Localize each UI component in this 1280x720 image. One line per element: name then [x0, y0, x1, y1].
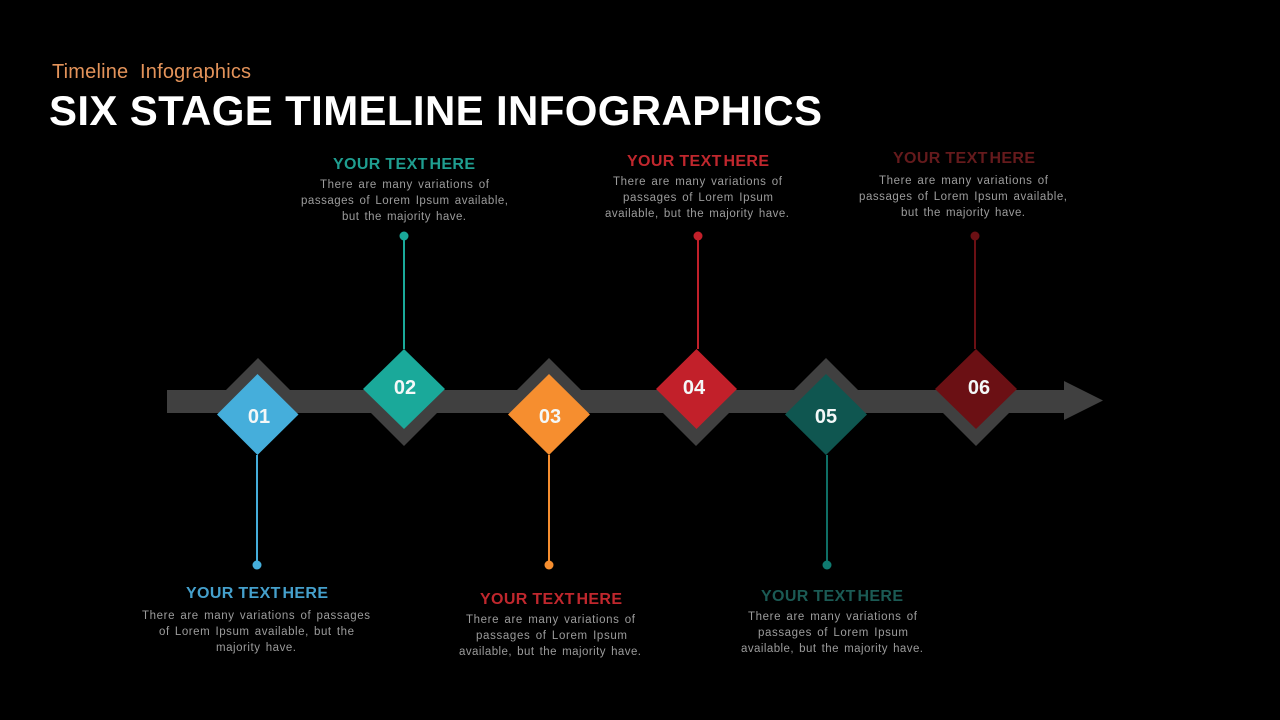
stage 01 description: There are many variations of passages	[142, 610, 370, 622]
stage 01 number: 01	[248, 406, 270, 428]
stage 05	[741, 358, 923, 655]
stage 02	[301, 156, 508, 446]
stage 04 backing diamond	[654, 362, 738, 446]
stage 01	[142, 358, 370, 654]
stage 03 description: available, but the majority have.	[459, 646, 641, 658]
stage 02 description: There are many variations of	[320, 179, 490, 191]
stage 04 description	[605, 176, 789, 220]
stage 03 end dot	[544, 560, 554, 570]
stage 04	[605, 153, 789, 446]
stage 06 description: passages of Lorem Ipsum available,	[859, 191, 1067, 203]
stage 05 end dot	[822, 560, 832, 570]
stage 02 heading: YOUR TEXT HERE	[333, 156, 475, 173]
stage 03	[459, 358, 641, 658]
stage 01 heading: YOUR TEXT HERE	[186, 585, 328, 602]
stage 03 backing diamond	[507, 358, 591, 442]
stage 06 connector line	[974, 236, 976, 349]
stage 03 description: passages of Lorem Ipsum	[476, 630, 627, 642]
stage 06 description	[859, 175, 1067, 219]
stage 02 description: but the majority have.	[342, 211, 466, 223]
stage 06 number: 06	[968, 377, 990, 399]
stage 04 end dot	[694, 232, 702, 240]
stage 02 description	[301, 179, 508, 223]
stage 06 backing diamond	[934, 362, 1018, 446]
stage 02 backing diamond	[362, 362, 446, 446]
title: SIX STAGE TIMELINE INFOGRAPHICS	[49, 87, 822, 134]
stage 01 description: majority have.	[216, 642, 296, 654]
stage 05 backing diamond	[784, 358, 868, 442]
stage 04 description: available, but the majority have.	[605, 208, 789, 220]
subtitle: Timeline Infographics	[52, 61, 251, 83]
stage 05 diamond	[785, 374, 867, 455]
stage 06 heading: YOUR TEXT HERE	[893, 150, 1035, 167]
stage 03 description: There are many variations of	[466, 614, 636, 626]
stage 05 description: passages of Lorem Ipsum	[758, 627, 908, 639]
stage 03 description	[459, 614, 641, 658]
stage 02 end dot	[400, 232, 408, 240]
stage 02 diamond	[363, 349, 445, 429]
stage 03 number: 03	[539, 406, 561, 428]
stage 05 description: available, but the majority have.	[741, 643, 923, 655]
stage 04 heading: YOUR TEXT HERE	[627, 153, 769, 170]
stage 05 description	[741, 611, 923, 655]
stage 03 heading: YOUR TEXT HERE	[480, 591, 622, 608]
stage 04 diamond	[656, 349, 737, 429]
stage 03 connector line	[548, 455, 550, 565]
stage 05 number: 05	[815, 406, 837, 428]
stage 01 end dot	[252, 560, 262, 570]
stage 02 description: passages of Lorem Ipsum available,	[301, 195, 508, 207]
stage 06	[859, 150, 1067, 446]
stage 04 number: 04	[683, 377, 706, 399]
stage 04 description: passages of Lorem Ipsum	[623, 192, 773, 204]
stage 04 description: There are many variations of	[613, 176, 783, 188]
stage 05 heading: YOUR TEXT HERE	[761, 588, 903, 605]
stage 03 diamond	[508, 374, 590, 455]
stage 06 description: but the majority have.	[901, 207, 1025, 219]
stage 01 backing diamond	[216, 358, 300, 442]
stage 02 number: 02	[394, 377, 416, 399]
stage 01 diamond	[217, 374, 298, 455]
timeline arrow	[167, 381, 1103, 420]
stage 06 diamond	[935, 349, 1017, 429]
stage 05 description: There are many variations of	[748, 611, 918, 623]
stage 02 connector line	[403, 236, 405, 349]
stage 01 connector line	[256, 455, 258, 565]
stage 05 connector line	[826, 455, 828, 565]
stage 04 connector line	[697, 236, 699, 349]
stage 01 description	[142, 610, 370, 654]
stage 06 end dot	[970, 232, 980, 240]
stage 06 description: There are many variations of	[879, 175, 1049, 187]
stage 01 description: of Lorem Ipsum available, but the	[159, 626, 354, 638]
